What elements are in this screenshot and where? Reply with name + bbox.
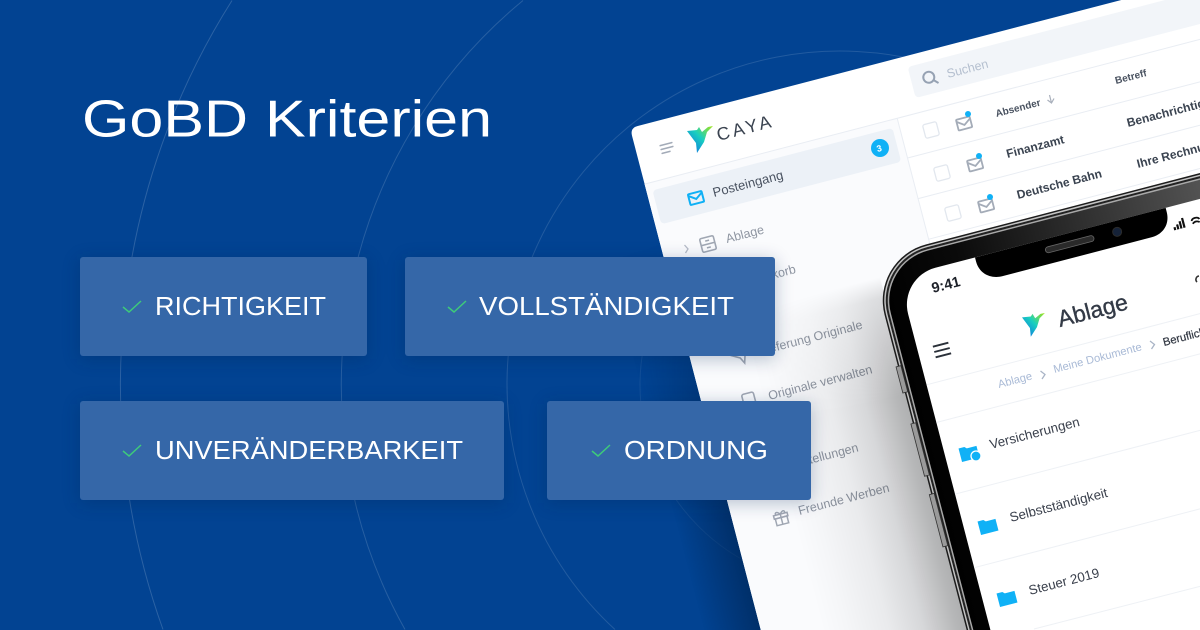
sidebar background: [645, 118, 1030, 630]
unread badge: [871, 139, 889, 157]
notch camera: [1112, 226, 1123, 237]
list row: Steuer 2019: [997, 565, 1101, 607]
menu item: Einstellungen: Einstellungen: [784, 440, 860, 473]
menu item: Lieferung Originale: Lieferung Originale: [758, 318, 864, 358]
icon: phone hamburger: [933, 343, 951, 357]
menu item: Ablage: [684, 223, 765, 253]
icon: phone bird logo: [1022, 313, 1045, 337]
menu item: Lieferung Originale: [732, 318, 864, 366]
table header: Absender: [994, 98, 1042, 120]
menu label: Posteingang: Posteingang: [711, 167, 785, 200]
criterion: Unveränderbarkeit: UNVERÄNDERBARKEIT: [155, 435, 463, 465]
active menu item highlight: [652, 128, 901, 224]
phone screen: [907, 199, 1200, 630]
panel: smartphone: [883, 173, 1200, 630]
list row: Steuer 2019: Steuer 2019: [1027, 565, 1101, 598]
table row: Finanzamt: Finanzamt: [1005, 132, 1066, 161]
criterion: Ordnung: [547, 401, 811, 500]
list row: Versicherungen: [959, 414, 1081, 462]
criterion: Vollständigkeit: VOLLSTÄNDIGKEIT: [479, 291, 734, 321]
icon: inbox envelope: [688, 191, 704, 205]
menu item: Originale verwalten: Originale verwalten: [767, 362, 874, 403]
list row: Versicherungen: Versicherungen: [988, 414, 1081, 452]
table row: Deutsche Bahn: [933, 140, 1200, 202]
menu item: Papierkorb: Papierkorb: [735, 262, 797, 291]
status bar: signal: [1172, 218, 1186, 230]
unread badge: 3: [875, 143, 883, 154]
criterion: Richtigkeit: [80, 257, 367, 356]
logo wordmark: CAYA: [714, 111, 776, 145]
criterion: Ordnung: ORDNUNG: [624, 435, 768, 465]
table row: Finanzamt: [922, 96, 1200, 161]
panel: desktop app window: [632, 0, 1200, 630]
table header: [994, 68, 1149, 120]
phone metal frame: [883, 173, 1200, 630]
icon: search: [922, 70, 939, 86]
phone side buttons: [896, 366, 948, 547]
menu item: Freunde Werben: Freunde Werben: [797, 481, 891, 518]
breadcrumb: Meine Dokumente: [1052, 341, 1143, 376]
list row: Selbstständigkeit: Selbstständigkeit: [1008, 485, 1109, 525]
phone shadow on app window: [802, 282, 967, 630]
menu item: Ablage: Ablage: [724, 223, 765, 246]
phone heading: Ablage: [1055, 289, 1131, 332]
table row: Deutsche Bahn: Deutsche Bahn: [1015, 166, 1103, 202]
title: GoBD Kriterien: [82, 90, 492, 148]
criterion: Vollständigkeit: [405, 257, 775, 356]
app window shadow: [661, 356, 760, 630]
status bar: wifi: [1191, 217, 1200, 224]
icon: CAYA bird logo: [687, 126, 713, 153]
criterion: Richtigkeit: RICHTIGKEIT: [155, 291, 326, 321]
list row: Selbstständigkeit: [978, 485, 1109, 535]
notch speaker: [1045, 235, 1095, 253]
icon: menu: [660, 143, 674, 153]
status bar: time: 9:41: [930, 274, 962, 297]
phone notch: [975, 208, 1172, 282]
icon: phone header right glyph: [1196, 276, 1199, 282]
menu item: Freunde Werben: [773, 481, 891, 526]
breadcrumb: Ablage: [997, 371, 1033, 391]
breadcrumb: [997, 326, 1200, 391]
app window body: [632, 0, 1200, 630]
search placeholder: Suchen: [945, 57, 990, 81]
table row: third row: [944, 194, 994, 222]
search field: [908, 0, 1200, 98]
table header: Betreff: [1114, 68, 1149, 87]
box shadows: [80, 260, 811, 503]
criterion: Unveränderbarkeit: [80, 401, 504, 500]
